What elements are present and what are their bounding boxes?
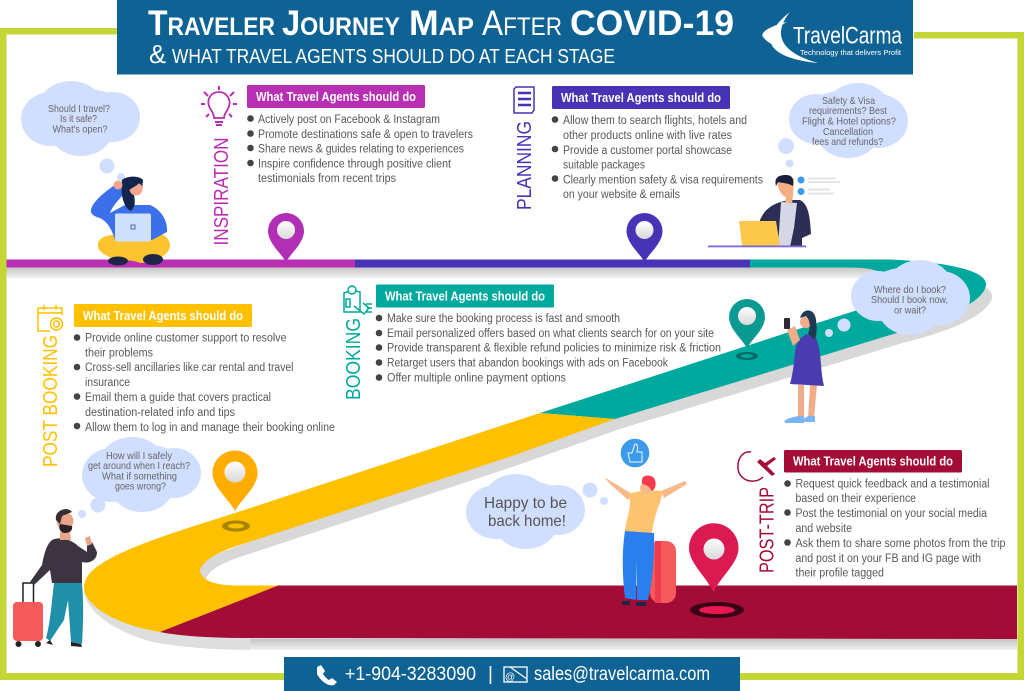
- icon: phone: [317, 665, 337, 685]
- thought bubble: how will I get around: What if something: [102, 470, 177, 482]
- panel: post booking: [38, 304, 335, 532]
- thought bubble: where do I book: [825, 260, 970, 337]
- bullet list: Inspire confidence through positive client: [258, 158, 452, 170]
- icon: light bulb: [201, 86, 237, 125]
- bullet list: Share news & guides relating to experiences: [258, 144, 464, 156]
- thought bubble: happy to be back home: back home!: [488, 513, 566, 530]
- bullet list: Allow them to search flights, hotels and: [563, 115, 747, 127]
- logo: [762, 12, 903, 63]
- bullet list: [552, 115, 763, 201]
- bullet list: suitable packages: [563, 160, 645, 172]
- thought bubble: safety and visa: fees and refunds?: [812, 136, 883, 148]
- vertical label: inspiration: INSPIRATION: [211, 138, 233, 246]
- bullet list: Retarget users that abandon bookings with ads on Facebook: [387, 358, 668, 370]
- vertical label: post trip: POST-TRIP: [756, 487, 778, 573]
- road: post booking segment: [84, 413, 615, 632]
- logo: Technology that delivers Profit: [800, 48, 902, 57]
- thought bubble: where do I book: Where do I book?: [874, 284, 946, 296]
- thought bubble: safety and visa: requirements? Best: [809, 105, 887, 117]
- location pin: purple: [268, 213, 304, 262]
- bullet list: [74, 332, 335, 434]
- thought bubble: safety and visa: Cancellation: [823, 126, 873, 138]
- bullet list: Post the testimonial on your social media: [796, 508, 988, 520]
- bullet list: Request quick feedback and a testimonial: [796, 478, 990, 490]
- bullet list: Provide a customer portal showcase: [563, 145, 732, 157]
- thought bubble: happy to be back home: Happy to be: [484, 495, 567, 512]
- bullet list: Provide transparent & flexible refund policies to minimize risk & friction: [387, 342, 721, 354]
- bullet list: other products online with live rates: [563, 130, 732, 142]
- thought bubble: safety and visa: [778, 83, 908, 168]
- title: COVID-19: [570, 4, 734, 43]
- thought bubble: how will I get around: How will I safely: [106, 450, 173, 462]
- icon: plane and loop: [738, 452, 776, 481]
- bullet list: Cross-sell ancillaries like car rental and travel: [85, 362, 294, 374]
- location pin: indigo: [626, 213, 662, 262]
- heading: what travel agents should do: [247, 85, 425, 108]
- icon: map and hand: [344, 286, 372, 314]
- subtitle: [149, 39, 615, 69]
- road: planning segment: [355, 260, 750, 268]
- bullet list: Email them a guide that covers practical: [85, 392, 271, 404]
- heading: what travel agents should do: What Travel Agents should do: [561, 90, 721, 105]
- character: man at desk with laptop: [708, 175, 840, 247]
- heading: what travel agents should do: What Travel Agents should do: [385, 288, 545, 304]
- bullet list: Provide online customer support to resolve: [85, 332, 286, 344]
- thought bubble: should I travel: [21, 81, 140, 181]
- bullet list: Offer multiple online payment options: [387, 372, 566, 384]
- character: happy person with suitcase: [604, 476, 687, 606]
- subtitle: &: [149, 39, 166, 69]
- vertical label: planning: PLANNING: [514, 121, 536, 210]
- location pin: red: [689, 523, 744, 618]
- bullet list: Make sure the booking process is fast and smooth: [387, 313, 620, 325]
- bullet list: destination-related info and tips: [85, 407, 235, 419]
- heading: what travel agents should do: [784, 450, 962, 472]
- thought bubble: should I travel: Is it safe?: [60, 113, 97, 125]
- character: man with suitcase: [13, 509, 97, 647]
- thought bubble: how will I get around: goes wrong?: [115, 480, 166, 492]
- bullet list: Ask them to share some photos from the trip: [796, 538, 1006, 550]
- bullet list: Allow them to log in and manage their booking online: [85, 422, 335, 434]
- location pin: teal: [729, 299, 765, 360]
- thought bubble: should I travel: Should I travel?: [48, 103, 110, 115]
- heading: what travel agents should do: [376, 284, 554, 308]
- bullet list: [247, 114, 473, 185]
- footer contact band: [284, 657, 740, 691]
- thought bubble: where do I book: or wait?: [894, 304, 926, 316]
- icon: email: @: [505, 672, 515, 683]
- header band: [117, 0, 913, 74]
- thought bubble: how will I get around: get around when I reach?: [88, 460, 190, 472]
- title: MAP: [409, 4, 474, 43]
- thought bubble: where do I book: Should I book now,: [871, 294, 948, 306]
- title: AFTER: [482, 4, 562, 43]
- title: [148, 4, 734, 43]
- icon: checklist document: [514, 87, 534, 113]
- divider pipe: |: [488, 664, 493, 685]
- thought bubble: should I travel: What's open?: [52, 124, 108, 136]
- road: post trip segment: [160, 586, 1017, 639]
- bullet list: Email personalized offers based on what clients search for on your site: [387, 328, 714, 340]
- thought bubble: how will I get around: [78, 437, 201, 518]
- location pin: yellow: [212, 450, 258, 532]
- heading: what travel agents should do: What Travel Agents should do: [256, 89, 416, 104]
- subtitle: WHAT TRAVEL AGENTS SHOULD DO AT EACH STAGE: [172, 45, 615, 68]
- bullet list: testimonials from recent trips: [258, 173, 396, 185]
- character: woman with laptop: [91, 177, 170, 266]
- bullet list: based on their experience: [796, 493, 916, 505]
- heading: what travel agents should do: What Travel Agents should do: [793, 454, 953, 468]
- thought bubble: happy to be back home: [466, 474, 608, 549]
- bullet list: [784, 478, 1006, 580]
- logo: TravelCarma: [793, 22, 903, 50]
- title: JOURNEY: [282, 4, 400, 43]
- thought bubble: safety and visa: Safety & Visa: [822, 95, 875, 107]
- vertical label: post booking: POST BOOKING: [40, 335, 62, 467]
- panel: planning: [514, 86, 763, 262]
- vertical label: booking: BOOKING: [343, 318, 365, 400]
- title: TRAVELER: [148, 4, 275, 43]
- heading: what travel agents should do: What Travel Agents should do: [83, 308, 243, 323]
- phone number: +1-904-3283090: [345, 664, 476, 685]
- panel: booking: [343, 284, 765, 400]
- character: woman with phone: [784, 310, 824, 423]
- bullet list: insurance: [85, 377, 130, 389]
- bullet list: Actively post on Facebook & Instagram: [258, 114, 440, 126]
- bullet list: and website: [796, 523, 852, 535]
- bullet list: their problems: [85, 348, 153, 360]
- bullet list: on your website & emails: [563, 189, 680, 201]
- bullet list: Clearly mention safety & visa requirements: [563, 174, 763, 186]
- icon: thumbs up: [621, 439, 649, 467]
- email address: sales@travelcarma.com: [534, 664, 710, 685]
- road: booking segment: [540, 260, 986, 419]
- bullet list: their profile tagged: [796, 568, 884, 580]
- bullet list: Promote destinations safe & open to travelers: [258, 129, 473, 141]
- road: inspiration segment: [6, 260, 356, 268]
- journey road: [6, 260, 1017, 650]
- heading: what travel agents should do: [552, 86, 730, 109]
- thought bubble: safety and visa: Flight & Hotel options?: [802, 116, 896, 128]
- icon: email: [504, 667, 527, 683]
- bullet list: and post it on your FB and IG page with: [796, 553, 981, 565]
- heading: what travel agents should do: [74, 304, 252, 327]
- icon: calendar and gear: [38, 305, 62, 331]
- bullet list: [376, 313, 721, 384]
- panel: inspiration: [201, 85, 473, 262]
- panel: post trip: [689, 450, 1006, 618]
